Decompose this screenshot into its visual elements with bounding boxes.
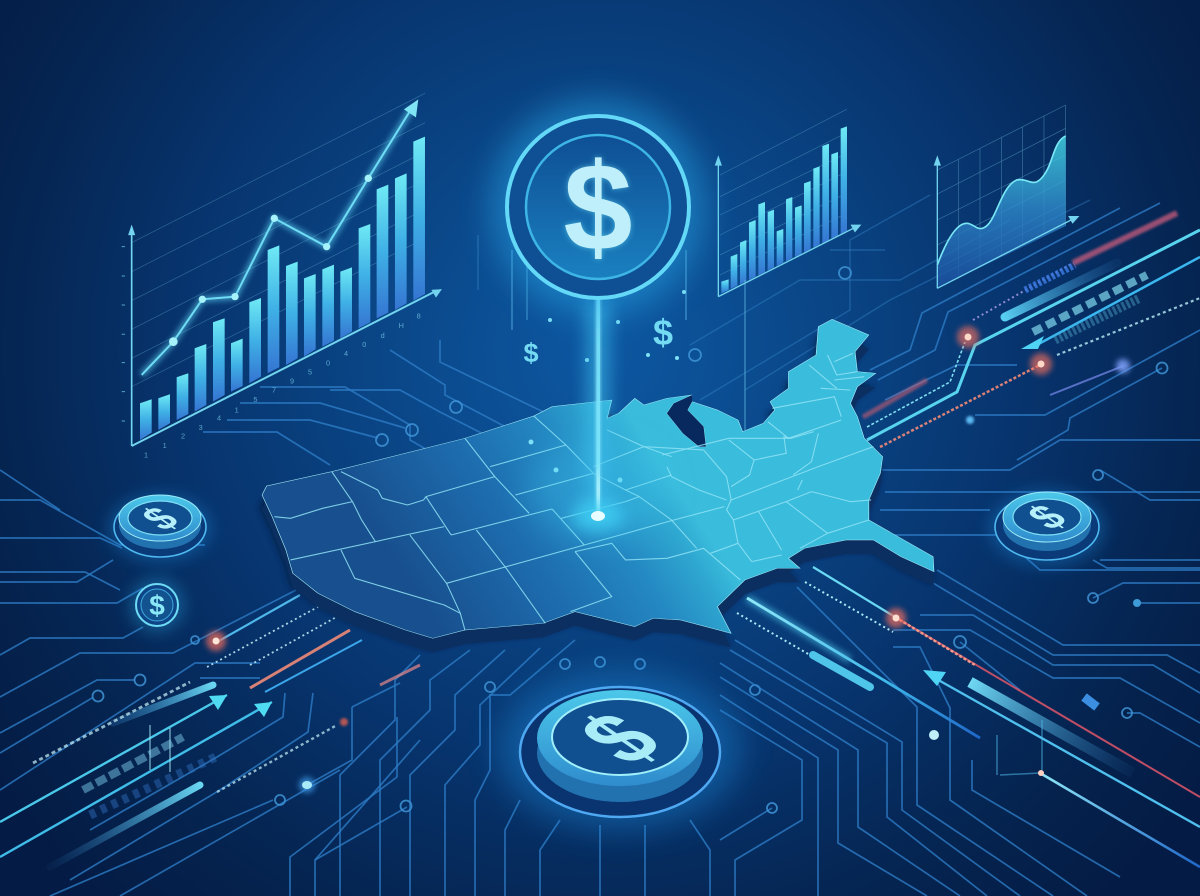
- area fill and curve: [937, 136, 1066, 288]
- chart axis labels: 1: [163, 441, 167, 450]
- coin: left: [108, 494, 212, 562]
- chart axes: [122, 225, 442, 446]
- chart axis labels: 4: [344, 349, 348, 358]
- arrow: upper right stream: [1021, 336, 1044, 349]
- circuit traces: upper right: [689, 195, 1200, 570]
- coin: bottom: $: [558, 698, 683, 779]
- circuit traces: lower centre: [340, 640, 760, 896]
- falling data lines: [478, 235, 745, 482]
- small chart grid lines: [720, 109, 847, 275]
- small chart bars: [721, 126, 847, 293]
- area chart axes: [935, 157, 1078, 288]
- chart axis labels: 4: [217, 414, 221, 423]
- state borders: [274, 353, 873, 630]
- glow nodes: upper right: [957, 326, 1130, 424]
- big dollar coin: $: [564, 139, 632, 277]
- big dollar coin: [490, 99, 706, 315]
- chart axis labels: 8: [417, 312, 421, 321]
- chart axis labels: 0: [362, 340, 366, 349]
- circuit traces: lower right: [720, 560, 1200, 896]
- chart axis labels: [144, 312, 421, 459]
- coin: small left: [130, 578, 184, 632]
- chart axis labels: H: [399, 321, 404, 330]
- map of the United States: [260, 319, 934, 652]
- small dollar signs: [523, 312, 673, 368]
- arrow: lower right stream: [923, 670, 946, 686]
- coin: left: $: [132, 500, 189, 537]
- bar chart: small centre-right chart: [716, 109, 860, 297]
- chart axis labels: d: [381, 331, 385, 340]
- chart axis labels: 5: [253, 395, 257, 404]
- big dollar coin: $: [564, 139, 632, 277]
- coin: small left: $: [149, 590, 165, 621]
- great lakes: [667, 395, 706, 447]
- chart grid lines: [132, 93, 425, 387]
- data streams: upper right: [863, 213, 1200, 447]
- glow nodes: lower right: [886, 608, 1044, 776]
- bar chart: large chart with trend line: [122, 93, 442, 459]
- small dollar signs: $: [523, 338, 539, 368]
- coin: right: $: [1016, 497, 1077, 537]
- area chart: upper right: [935, 105, 1078, 288]
- coin: right: [989, 490, 1105, 566]
- chart axis labels: 1: [144, 450, 148, 459]
- small chart axes: [716, 157, 860, 297]
- chart axis labels: 3: [199, 423, 203, 432]
- chart axis labels: 1: [235, 406, 239, 415]
- central beam: [528, 298, 668, 540]
- map extrusion shadow: [260, 331, 934, 652]
- glow nodes: lower left: [206, 590, 376, 793]
- trend line with arrow: [142, 99, 418, 375]
- circuit traces: lower left: [0, 560, 420, 896]
- map surface: [262, 319, 934, 638]
- area chart grid: [937, 105, 1066, 278]
- chart axis labels: 0: [326, 358, 330, 367]
- chart axis labels: 7: [272, 386, 276, 395]
- chart bars: [140, 137, 425, 440]
- small dollar signs: $: [653, 312, 673, 353]
- arrows: lower left stream: [209, 695, 272, 717]
- chart axis labels: 2: [181, 432, 185, 441]
- data streams: lower left: [0, 595, 420, 867]
- chart axis labels: 9: [290, 376, 294, 385]
- circuit traces: upper left: [0, 340, 560, 590]
- chart axis labels: 5: [308, 367, 312, 376]
- data streams: lower right: [737, 567, 1200, 867]
- coin: bottom: [498, 670, 742, 830]
